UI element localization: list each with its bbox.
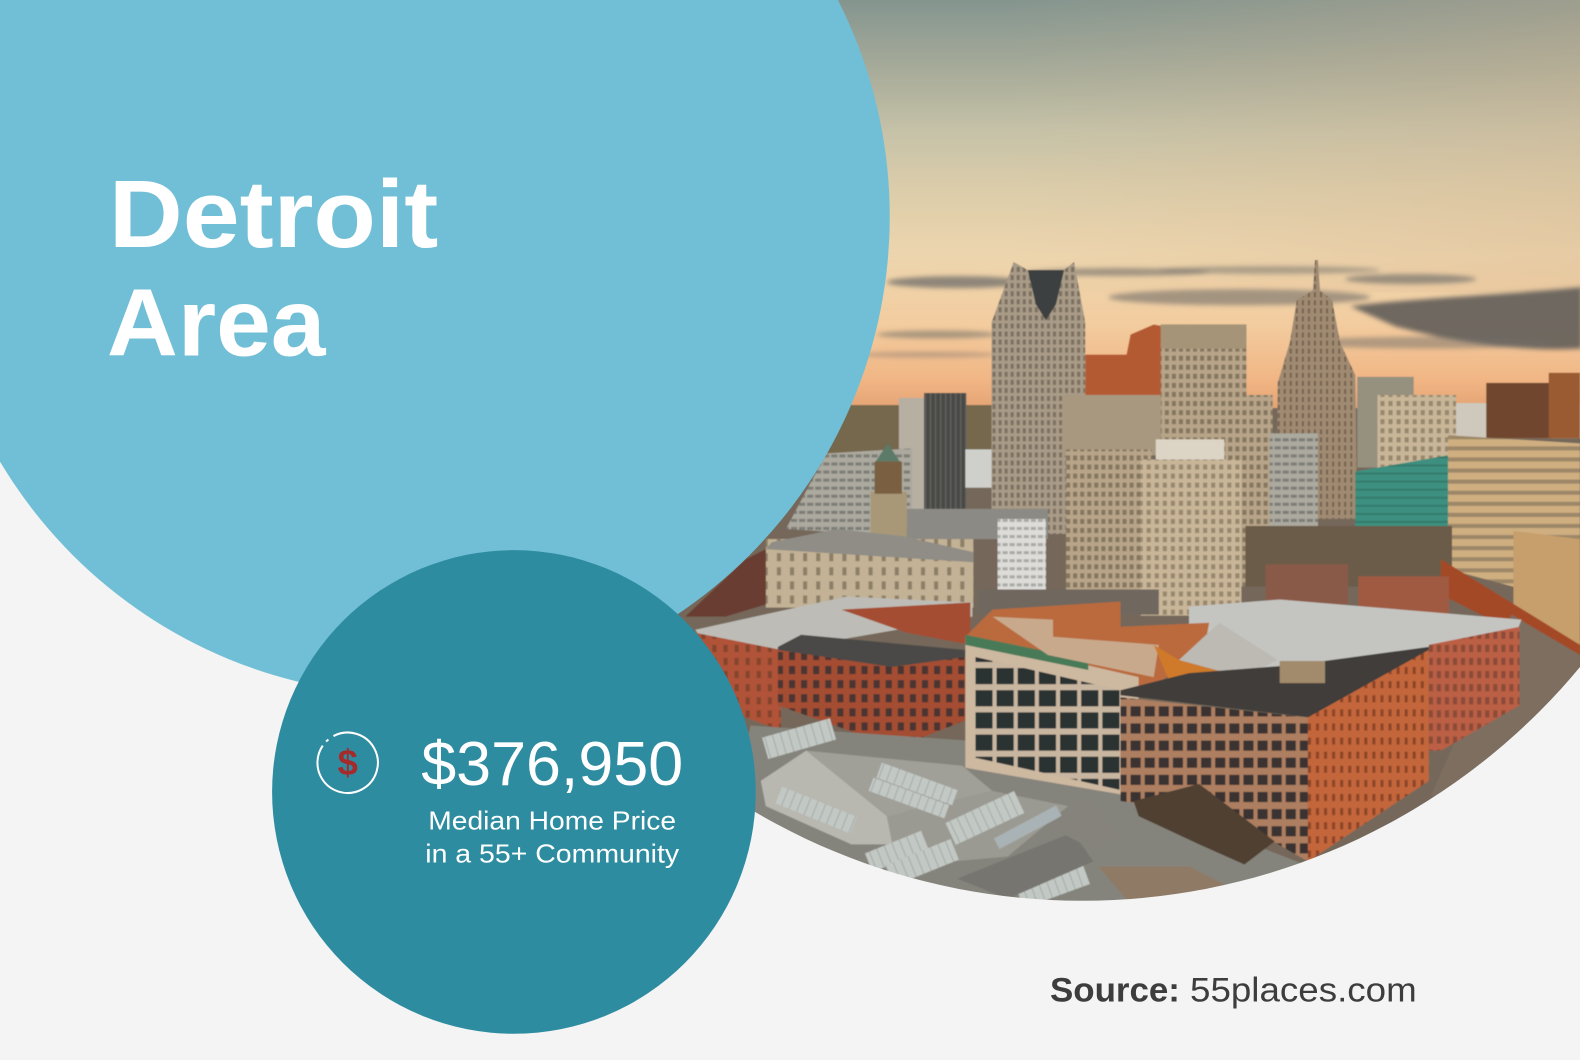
title	[107, 161, 438, 377]
silver sloped roof and orange wall	[1154, 623, 1278, 680]
ground underlay	[678, 408, 1580, 863]
source note: 55places.com	[1190, 972, 1417, 1010]
white building	[998, 519, 1046, 595]
light blue circle	[0, 0, 890, 695]
central tall tower	[1161, 324, 1246, 586]
cream office with black windows	[965, 602, 1209, 801]
left red building	[695, 633, 781, 731]
source note	[1050, 972, 1417, 1010]
clock tower	[871, 443, 907, 537]
rooftop units	[762, 718, 1090, 908]
sky	[838, 0, 1580, 409]
dark brick behind hall	[685, 549, 766, 617]
teal building	[1354, 455, 1448, 526]
distant red building	[1084, 324, 1162, 396]
glass atrium	[1134, 784, 1275, 865]
lower rooftops	[748, 725, 1300, 901]
horizon	[828, 404, 992, 453]
price figure: $376,950	[421, 729, 683, 799]
mid tan block	[1063, 395, 1161, 455]
title: Detroit	[109, 161, 438, 268]
dark teal circle	[272, 550, 756, 1034]
icon: dollar sign in ring: $	[338, 742, 358, 783]
main brick office building	[1120, 647, 1429, 862]
left parking roof	[695, 597, 972, 650]
red-brick warehouse	[778, 635, 965, 748]
left office block	[786, 448, 912, 534]
title: Area	[107, 270, 326, 377]
right midrise towers	[1357, 377, 1414, 468]
icon: dollar sign in ring	[307, 722, 389, 804]
small red-brick blocks	[1266, 564, 1348, 605]
Penobscot tower	[1277, 260, 1357, 519]
photo: Detroit skyline at sunset in circular crop	[678, 0, 1580, 901]
mid-ground trees and plaza	[1245, 526, 1452, 586]
source note: Source:	[1050, 972, 1180, 1010]
clouds	[857, 266, 1580, 358]
far right red building	[1429, 627, 1520, 751]
old county building	[766, 529, 973, 608]
price caption	[425, 805, 680, 869]
right street	[1510, 614, 1580, 666]
front pale tower	[1156, 439, 1224, 461]
price caption: in a 55+ Community	[425, 839, 680, 869]
Renaissance tower	[992, 262, 1085, 534]
gold office building	[1448, 435, 1580, 605]
large parking roof	[1188, 598, 1522, 668]
price caption: Median Home Price	[428, 805, 676, 835]
brown far-right buildings	[1486, 383, 1552, 438]
dark glass tower	[899, 393, 966, 511]
